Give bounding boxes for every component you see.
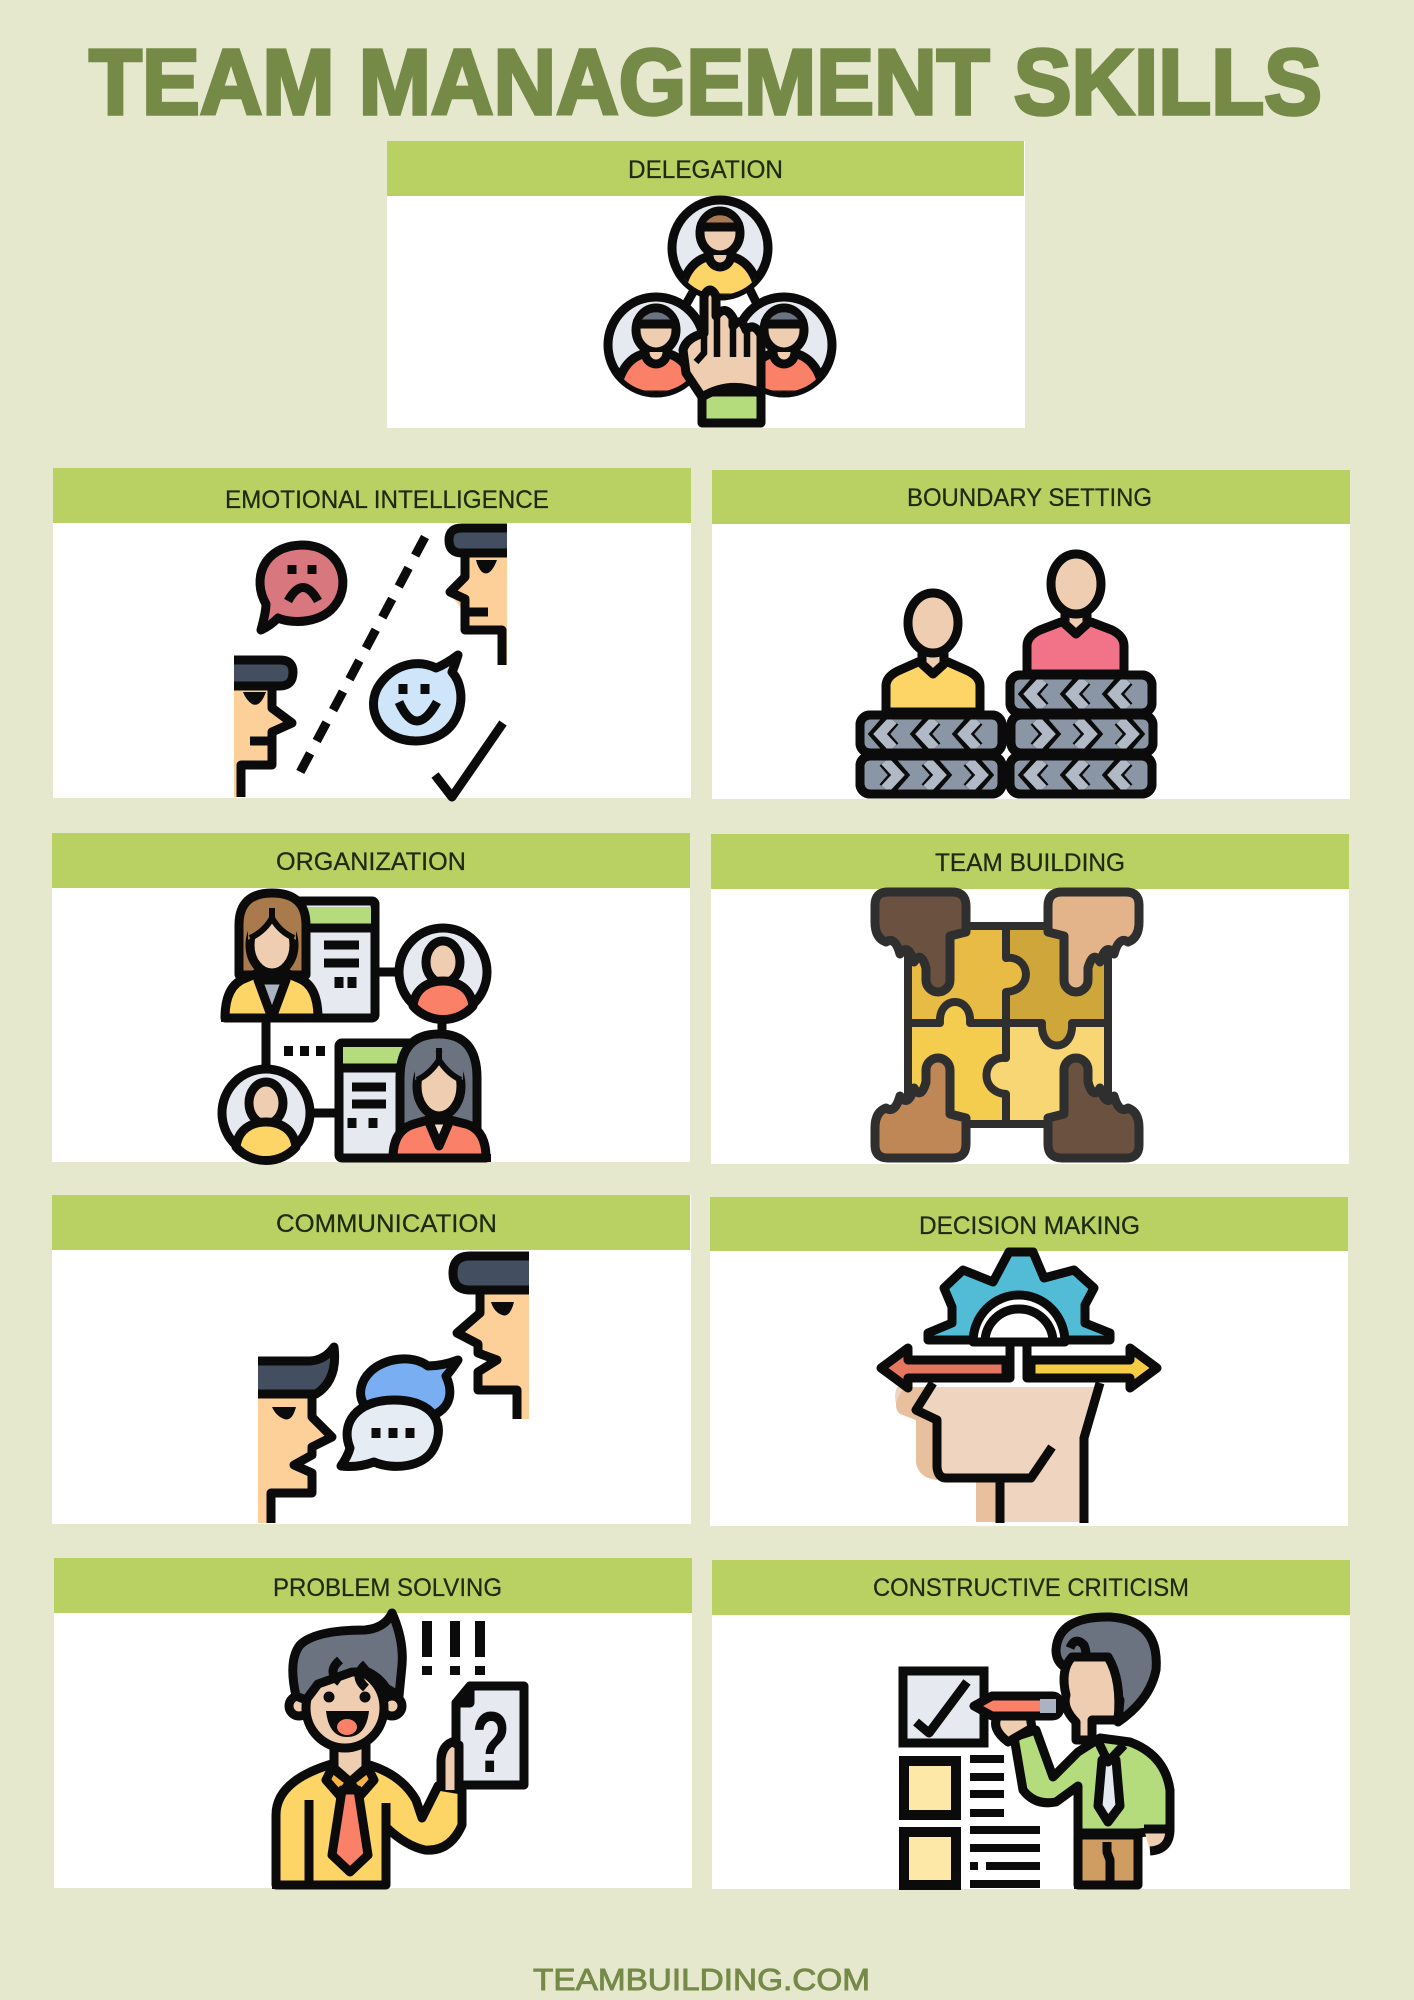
panel: decision making [710,1197,1348,1526]
panel: team building [711,834,1349,1164]
heading: boundary setting: BOUNDARY SETTING [907,484,1152,512]
heading: delegation: DELEGATION [628,156,783,184]
panel: organization [52,833,690,1162]
icon: faces with mood bubbles [234,528,507,797]
icon: four hands holding jigsaw puzzle [875,892,1139,1158]
heading: organization: ORGANIZATION [276,848,466,876]
icon: man checking a list with a pencil [903,1617,1170,1885]
heading: emotional intelligence: EMOTIONAL INTELLIGENCE [225,486,549,514]
heading: problem solving: PROBLEM SOLVING [273,1574,502,1602]
panel: problem solving [54,1558,692,1888]
panel: emotional intelligence [53,468,691,798]
icon: managers, task cards and team members [221,893,491,1161]
icon: two people talking with speech bubbles [258,1256,529,1523]
heading: communication: COMMUNICATION [276,1210,497,1238]
icon: hand pointing at three team members [608,200,832,423]
panel: communication [52,1195,691,1524]
icon: excited man holding question paper [272,1613,524,1885]
panel: constructive criticism [712,1560,1350,1889]
title: TEAM MANAGEMENT SKILLS [89,30,1322,134]
heading: team building: TEAM BUILDING [935,849,1125,877]
panel: delegation [387,141,1025,428]
heading: decision making: DECISION MAKING [919,1212,1140,1240]
icon: question mark: ? [472,1695,510,1791]
heading: constructive criticism: CONSTRUCTIVE CRITICISM [873,1574,1189,1602]
icon: two people behind tyre stacks [860,554,1153,794]
footer: website: TEAMBUILDING.COM [533,1962,870,1997]
icon: head with gear and diverging arrows [881,1252,1157,1523]
panel: boundary setting [712,470,1350,799]
